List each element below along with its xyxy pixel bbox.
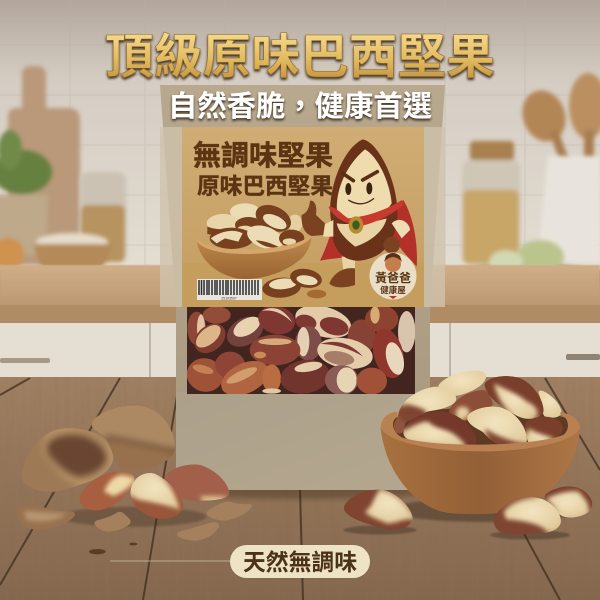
product bag — [160, 85, 445, 490]
potted plant — [0, 130, 52, 255]
wooden spoons — [515, 73, 600, 180]
brand logo badge — [370, 252, 416, 300]
legs — [342, 257, 355, 270]
white jug — [540, 156, 600, 262]
shadow under bag — [165, 481, 445, 499]
brazil nut shells and loose nuts left — [17, 406, 254, 554]
loose illustrated nuts — [262, 266, 326, 299]
mascot nut hero — [302, 139, 417, 287]
cracked husk — [22, 428, 113, 492]
kitchen background — [0, 0, 600, 379]
shell fragments — [17, 501, 254, 554]
brand logo badge: 健康屋 — [380, 285, 406, 295]
bowl body — [381, 428, 580, 514]
illustrated nut bowl — [197, 200, 312, 279]
reddish nut — [164, 465, 229, 501]
cutting board — [8, 66, 80, 265]
eyes and eyebrows — [343, 172, 377, 204]
mascot belly — [337, 218, 387, 247]
bowl interior — [381, 408, 579, 449]
tray with greens — [447, 240, 600, 290]
subtitle: 自然香脆，健康首選 — [168, 90, 432, 123]
cream nut — [131, 473, 183, 519]
cabinets — [0, 323, 600, 379]
barcode: 25103597 — [221, 296, 237, 300]
nuts in bowl — [394, 371, 563, 448]
bag upper body — [160, 85, 445, 395]
brand logo badge: 黃爸爸 — [375, 270, 411, 285]
thumbs up hand — [302, 201, 333, 237]
right arm — [383, 220, 410, 253]
bottom badge — [110, 545, 370, 578]
wooden bowl of brazil nuts — [381, 371, 583, 522]
nut body — [330, 139, 397, 261]
whole husk — [90, 406, 175, 472]
loose nuts on table right — [343, 487, 592, 540]
bottom badge: 天然無調味 — [243, 549, 357, 575]
title: 頂級原味巴西堅果 — [105, 31, 495, 84]
glass jar right — [462, 141, 520, 264]
nut with cream patch — [79, 472, 135, 510]
label heading: 無調味堅果 — [193, 139, 333, 171]
transparent window with nuts — [187, 307, 415, 394]
cape right — [392, 200, 417, 267]
front label — [182, 127, 424, 307]
small bowl left — [0, 233, 112, 279]
bag lower panel — [176, 392, 430, 490]
cape left — [320, 223, 347, 261]
kitchen counter — [0, 265, 600, 323]
brooch — [349, 216, 363, 234]
cape collar — [328, 200, 403, 227]
wooden table — [0, 377, 600, 600]
label subheading: 原味巴西堅果 — [197, 174, 333, 199]
mascot face — [337, 149, 392, 223]
bowl rim — [381, 412, 580, 451]
storage jar left — [80, 172, 126, 262]
barcode — [197, 279, 262, 300]
